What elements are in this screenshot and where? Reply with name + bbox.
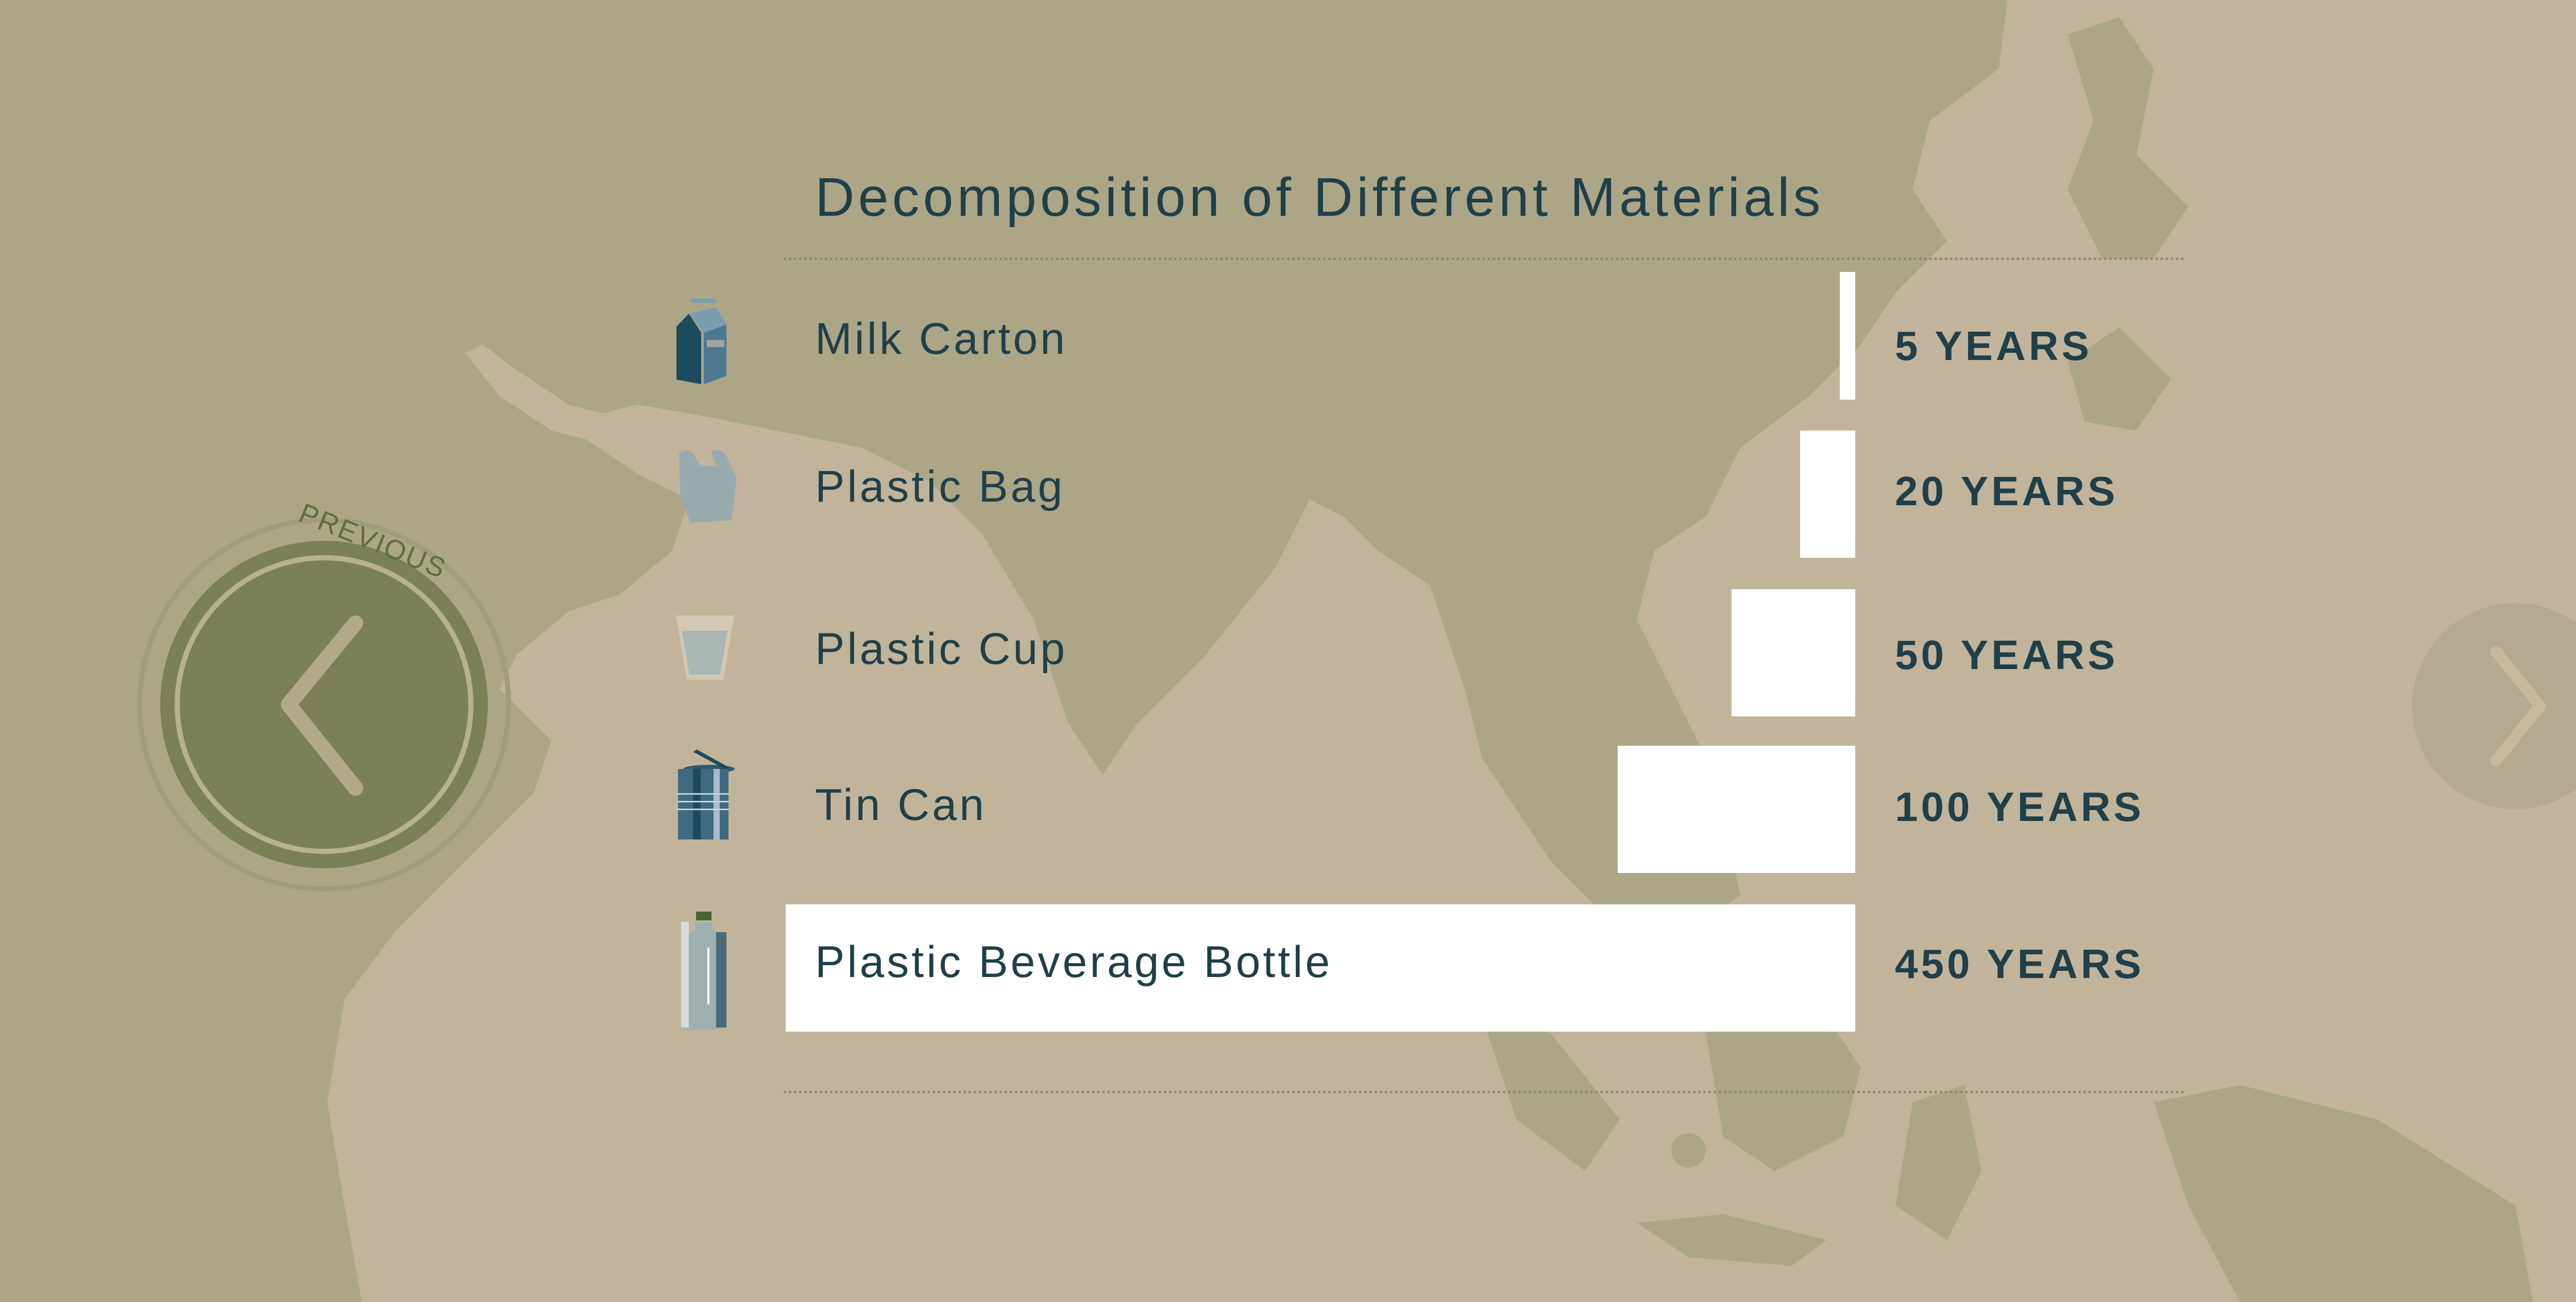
next button bbox=[2412, 603, 2576, 809]
icon: milk carton bbox=[676, 299, 726, 384]
value: 100 years: 100 YEARS bbox=[1895, 784, 2144, 830]
label: milk carton: Milk Carton bbox=[815, 314, 1067, 364]
icon: plastic bag bbox=[679, 450, 737, 523]
previous button bbox=[137, 518, 511, 892]
bar: bottle bbox=[786, 904, 1855, 1032]
icon: tin can bbox=[677, 749, 735, 840]
value: 5 years: 5 YEARS bbox=[1895, 323, 2092, 369]
value: 20 years: 20 YEARS bbox=[1895, 468, 2118, 514]
icons bbox=[676, 299, 737, 1030]
bar: tin can bbox=[1618, 746, 1855, 873]
previous label: PREVIOUS bbox=[295, 498, 451, 585]
value: 50 years: 50 YEARS bbox=[1895, 632, 2118, 678]
bar chart bbox=[786, 272, 1855, 1032]
title: Decomposition of Different Materials bbox=[815, 167, 1824, 228]
bar: plastic bag bbox=[1800, 431, 1855, 558]
value: 450 years: 450 YEARS bbox=[1895, 941, 2144, 987]
bar: plastic cup bbox=[1732, 589, 1855, 716]
icon: bottle bbox=[681, 912, 726, 1031]
row labels bbox=[815, 314, 1332, 987]
label: plastic bag: Plastic Bag bbox=[815, 462, 1065, 511]
icon: plastic cup bbox=[676, 615, 734, 680]
year values bbox=[1895, 323, 2144, 987]
label: plastic cup: Plastic Cup bbox=[815, 624, 1067, 674]
label: bottle: Plastic Beverage Bottle bbox=[815, 937, 1332, 987]
previous circle bbox=[140, 520, 509, 889]
bar: milk carton bbox=[1840, 272, 1855, 400]
icon: chevron right bbox=[2496, 652, 2540, 761]
icon: chevron left bbox=[289, 623, 355, 788]
label: tin can: Tin Can bbox=[815, 780, 987, 830]
